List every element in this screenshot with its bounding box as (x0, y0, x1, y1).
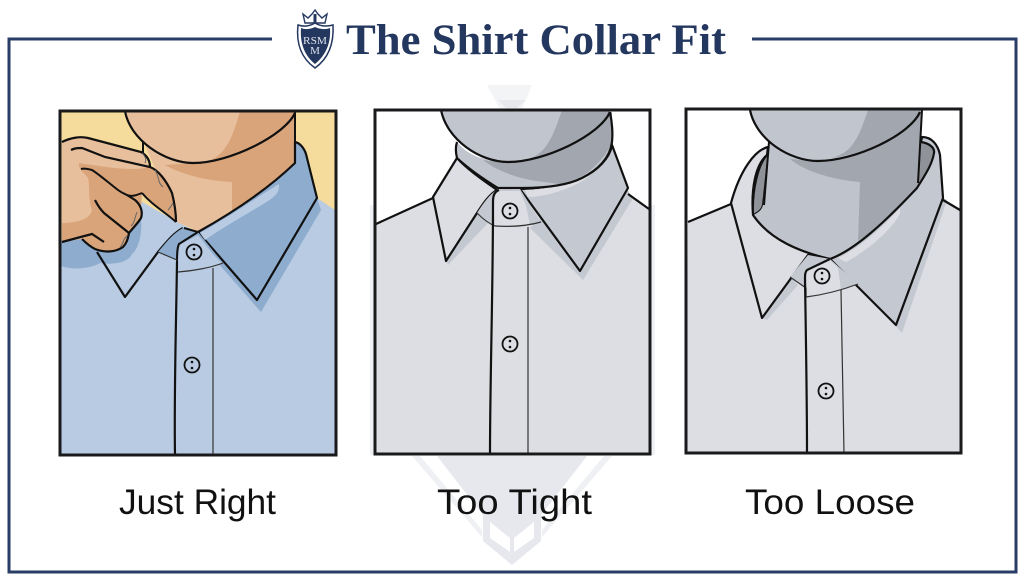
shirt body (61, 163, 335, 455)
right collar highlight (838, 208, 900, 262)
inner collar right (917, 142, 934, 186)
panel: too tight (375, 110, 650, 454)
right collar (198, 142, 317, 300)
neck (143, 111, 295, 231)
shoulder lines (376, 194, 649, 224)
panel frame (375, 110, 650, 454)
icon: crest logo: RSM (303, 35, 327, 47)
panel background (60, 111, 336, 455)
panel frame (686, 109, 961, 453)
collar stand and placket (790, 255, 858, 453)
icon: crest logo: M (310, 45, 320, 57)
icon: button (502, 204, 518, 352)
inner collar left (753, 150, 769, 215)
panel: too loose (686, 109, 961, 453)
panel frame (60, 111, 336, 455)
shirt body (376, 145, 649, 454)
left collar (97, 195, 183, 297)
shoulder lines (688, 200, 960, 222)
head (441, 110, 610, 162)
right collar highlight (525, 170, 594, 197)
label: too loose: Too Loose (745, 483, 915, 522)
left collar (731, 147, 830, 318)
icon: hand (62, 137, 176, 252)
watermark: faint shield behind the middle panel (370, 85, 655, 565)
head (750, 110, 920, 161)
icon: button (184, 244, 202, 372)
label: too tight: Too Tight (437, 483, 592, 522)
collar stand and placket (477, 189, 541, 454)
left collar outline (97, 228, 183, 297)
icon: button (814, 268, 834, 398)
left collar (433, 158, 497, 261)
collar stand and placket (158, 228, 223, 455)
collar shadows (446, 190, 632, 280)
hand shadow (61, 213, 141, 268)
right collar (830, 137, 943, 325)
panel background (686, 109, 961, 453)
right collar shadow (217, 198, 321, 312)
neck (750, 110, 922, 259)
right collar (520, 145, 628, 271)
shirt body (686, 200, 960, 453)
panel background (375, 110, 650, 454)
collar shadows (762, 198, 947, 333)
tight collar band (456, 112, 612, 188)
right collar highlight (200, 184, 279, 240)
panel: just right (60, 111, 336, 455)
label: just right: Just Right (119, 483, 276, 522)
title: The Shirt Collar Fit (346, 17, 727, 64)
icon: crest logo (298, 10, 333, 68)
chin (125, 111, 295, 163)
